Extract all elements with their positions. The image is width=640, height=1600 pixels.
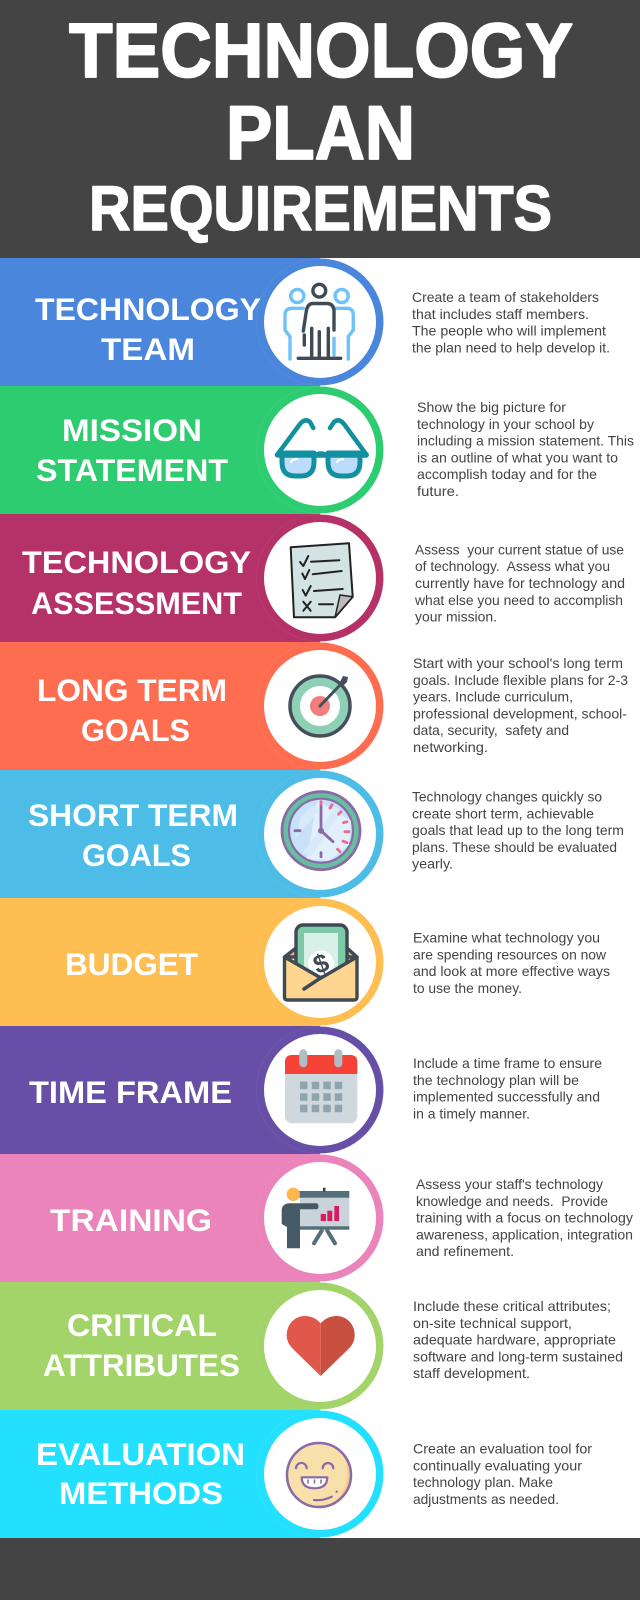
heading: technology assessment <box>22 544 251 621</box>
panel: time frame <box>0 1026 602 1154</box>
icon: glasses <box>277 420 367 476</box>
panel: long term goals <box>0 642 628 770</box>
footer panel <box>0 1538 640 1600</box>
description: critical attributes: software and long-term sustained <box>413 1349 623 1364</box>
description: long term goals: Start with your school's long term <box>413 656 623 671</box>
description: technology assessment: currently have for technology and <box>415 576 625 591</box>
panel: mission statement <box>0 386 634 514</box>
description: long term goals: networking. <box>413 740 488 755</box>
description: training: and refinement. <box>416 1244 514 1259</box>
description: training: knowledge and needs. Provide <box>416 1194 608 1209</box>
description: technology assessment: of technology. Assess what you <box>415 559 610 574</box>
description: training <box>416 1177 633 1259</box>
description: mission statement: including a mission statement. This <box>417 434 634 449</box>
title: REQUIREMENTS <box>89 174 552 244</box>
description: mission statement <box>417 400 634 499</box>
icon: smiling face <box>287 1443 351 1507</box>
description: short term goals: yearly. <box>412 857 453 872</box>
description: short term goals: plans. These should be evaluated <box>412 840 617 855</box>
heading: critical attributes: ATTRIBUTES <box>43 1347 240 1383</box>
heading: short term goals: GOALS <box>82 837 191 873</box>
description: long term goals: data, security, safety and <box>413 723 569 738</box>
description: training: Assess your staff's technology <box>416 1177 603 1192</box>
heading: evaluation methods: METHODS <box>59 1475 223 1511</box>
icon: clock <box>282 792 360 870</box>
heading: mission statement: STATEMENT <box>36 452 228 488</box>
description: evaluation methods: adjustments as needed. <box>413 1492 559 1507</box>
description: evaluation methods <box>413 1442 592 1507</box>
heading: time frame: TIME FRAME <box>29 1074 232 1110</box>
description: evaluation methods: technology plan. Make <box>413 1475 553 1490</box>
description: budget: are spending resources on now <box>413 947 606 962</box>
icon: calendar <box>285 1049 357 1123</box>
description: long term goals: professional development, school- <box>413 706 627 721</box>
heading: evaluation methods <box>36 1436 245 1511</box>
description: long term goals: goals. Include flexible plans for 2-3 <box>413 673 628 688</box>
description: short term goals: Technology changes quickly so <box>412 790 602 804</box>
heading: evaluation methods: EVALUATION <box>36 1436 245 1472</box>
description: critical attributes: Include these critical attributes; <box>413 1299 611 1314</box>
heading: training: TRAINING <box>50 1202 212 1238</box>
description: mission statement: technology in your school by <box>417 417 594 432</box>
icon: checklist <box>291 543 353 617</box>
description: time frame: the technology plan will be <box>413 1073 579 1088</box>
panel: technology team <box>0 258 610 386</box>
description: mission statement: future. <box>417 484 459 499</box>
panel: evaluation methods <box>0 1410 592 1538</box>
description: short term goals: goals that lead up to the long term <box>412 823 624 838</box>
title <box>69 8 573 244</box>
heading: technology team: TECHNOLOGY <box>35 291 261 327</box>
description: long term goals <box>413 656 628 755</box>
description: technology assessment: Assess your current statue of use <box>415 542 624 557</box>
icon: team of people <box>285 284 353 359</box>
heading: short term goals: SHORT TERM <box>28 797 238 833</box>
description: long term goals: years. Include curriculum, <box>413 690 573 705</box>
description: training: awareness, application, integration <box>416 1227 633 1242</box>
heading: critical attributes <box>43 1307 240 1383</box>
description: technology assessment: your mission. <box>415 610 497 625</box>
title: PLAN <box>226 91 415 176</box>
description: short term goals: create short term, achievable <box>412 806 594 821</box>
icon: heart <box>287 1316 355 1376</box>
heading: mission statement <box>36 412 228 488</box>
description: critical attributes <box>413 1299 623 1381</box>
description: technology team: the plan need to help develop it. <box>412 340 610 355</box>
heading: critical attributes: CRITICAL <box>67 1307 217 1343</box>
panel: training <box>0 1154 633 1282</box>
description: technology assessment <box>414 542 625 625</box>
heading: long term goals <box>37 672 227 748</box>
panel: critical attributes <box>0 1282 623 1410</box>
heading: technology team <box>35 291 261 367</box>
icon: money envelope <box>284 925 357 1000</box>
description: mission statement: accomplish today and for the <box>417 467 597 482</box>
heading: technology assessment: TECHNOLOGY <box>22 544 251 580</box>
heading: long term goals: LONG TERM <box>37 672 227 708</box>
description: evaluation methods: continually evaluating your <box>413 1458 582 1473</box>
description: time frame: implemented successfully and <box>413 1090 600 1105</box>
description: budget <box>413 930 610 996</box>
panel: short term goals <box>0 770 624 898</box>
heading: long term goals: GOALS <box>81 712 190 748</box>
description: mission statement: is an outline of what you want to <box>417 450 618 465</box>
heading: technology team: TEAM <box>101 331 195 367</box>
description: mission statement: Show the big picture for <box>417 400 566 415</box>
heading: short term goals <box>28 797 238 873</box>
description: critical attributes: on-site technical support, <box>413 1316 572 1331</box>
panel: budget <box>0 898 610 1026</box>
title: TECHNOLOGY <box>69 8 573 94</box>
header panel <box>0 0 640 258</box>
description: budget: and look at more effective ways <box>413 964 610 979</box>
description: time frame <box>413 1056 602 1121</box>
icon: presenter at board <box>282 1188 349 1248</box>
description: critical attributes: staff development. <box>413 1366 530 1381</box>
description: technology team: The people who will implement <box>412 324 606 339</box>
description: budget: to use the money. <box>413 981 522 996</box>
description: time frame: Include a time frame to ensure <box>413 1056 602 1071</box>
heading: technology assessment: ASSESSMENT <box>31 585 242 621</box>
description: evaluation methods: Create an evaluation tool for <box>413 1442 592 1456</box>
heading: budget: BUDGET <box>65 946 198 982</box>
description: technology assessment: what else you need to accomplish <box>414 593 623 608</box>
description: training: training with a focus on technology <box>416 1211 633 1226</box>
icon: money envelope: $ <box>309 947 333 980</box>
description: technology team: Create a team of stakeholders <box>412 290 599 305</box>
description: time frame: in a timely manner. <box>413 1106 530 1121</box>
panel: technology assessment <box>0 514 625 642</box>
description: technology team <box>412 290 610 355</box>
heading: mission statement: MISSION <box>62 412 202 448</box>
description: critical attributes: adequate hardware, appropriate <box>413 1333 616 1348</box>
description: budget: Examine what technology you <box>413 930 600 946</box>
description: technology team: that includes staff members. <box>412 307 589 322</box>
description: short term goals <box>412 790 624 872</box>
icon: target <box>290 676 350 736</box>
